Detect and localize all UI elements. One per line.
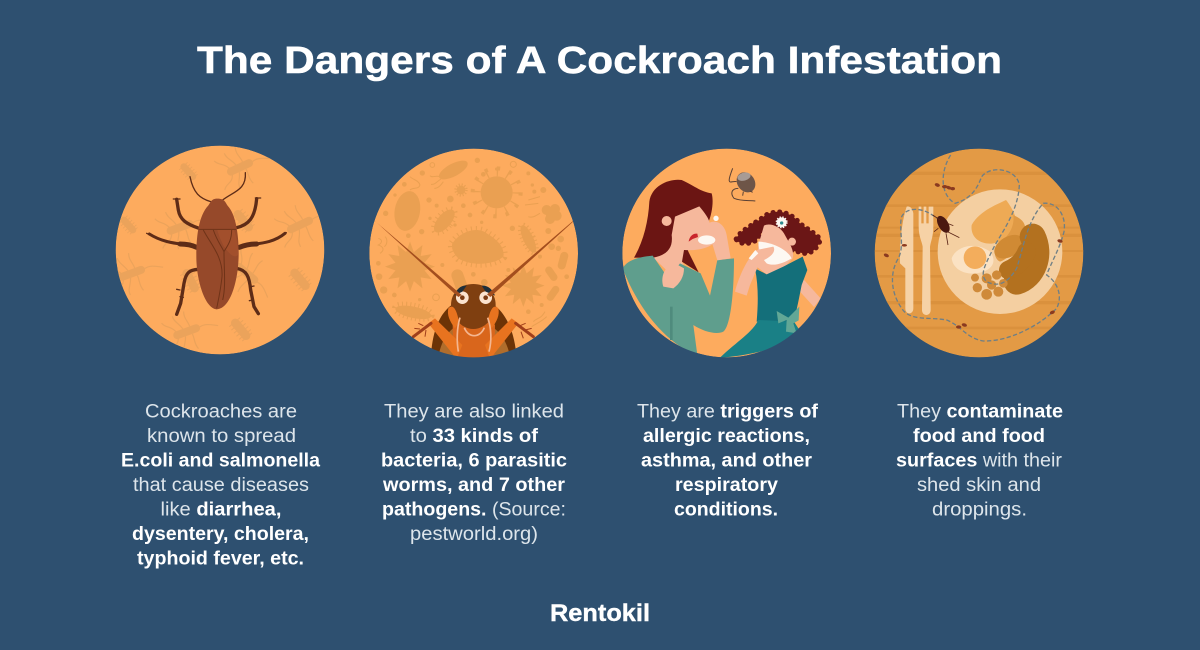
text block: column 3: respiratory bbox=[675, 475, 778, 496]
title: The Dangers of A Cockroach Infestation bbox=[197, 40, 1002, 82]
text block: column 3: conditions. bbox=[674, 500, 778, 520]
droppings bbox=[883, 183, 1063, 329]
panel: contaminated food plate illustration bbox=[874, 148, 1084, 358]
text block: column 4 bbox=[896, 402, 1063, 520]
girl bbox=[720, 212, 821, 358]
panel: sneezing woman and girl illustration bbox=[622, 149, 831, 358]
plate bbox=[938, 189, 1062, 314]
text block: column 3: allergic reactions, bbox=[643, 426, 810, 447]
text block: column 1: typhoid fever, etc. bbox=[137, 548, 304, 570]
background bacteria bbox=[116, 146, 324, 354]
knife and fork bbox=[900, 206, 933, 315]
food bbox=[952, 200, 1036, 300]
panel: bacteria and cockroach head illustration bbox=[369, 149, 578, 359]
woman bbox=[623, 180, 734, 355]
roach trail bbox=[892, 155, 1064, 341]
logo: Rentokil: Rentokil bbox=[550, 600, 650, 627]
text block: column 4: droppings. bbox=[932, 500, 1027, 520]
wood grain bbox=[874, 172, 1084, 330]
text block: column 2 bbox=[381, 402, 567, 545]
text block: column 4: food and food bbox=[913, 426, 1045, 447]
germs background bbox=[376, 157, 569, 327]
text block: column 4: They contaminate bbox=[897, 402, 1063, 422]
text block: column 3 bbox=[637, 402, 819, 520]
text block: column 1: like diarrhea, bbox=[160, 500, 282, 520]
infographic canvas bbox=[116, 45, 1084, 622]
cockroach bbox=[147, 173, 286, 314]
text block: column 1: dysentery, cholera, bbox=[132, 524, 309, 545]
text block: column 2: to 33 kinds of bbox=[410, 426, 539, 447]
text block: column 2: pathogens. (Source: bbox=[382, 500, 566, 520]
text block: column 4: shed skin and bbox=[917, 475, 1041, 496]
cockroach head bbox=[374, 220, 574, 359]
text block: column 4: surfaces with their bbox=[896, 450, 1063, 472]
text block: column 1: known to spread bbox=[147, 426, 296, 447]
text block: column 2: bacteria, 6 parasitic bbox=[381, 450, 567, 472]
cockroach flying bbox=[729, 168, 759, 201]
text block: column 1: Cockroaches are bbox=[145, 402, 297, 422]
text block: column 3: They are triggers of bbox=[637, 402, 819, 422]
text block: column 2: pestworld.org) bbox=[410, 524, 538, 545]
text block: column 1: that cause diseases bbox=[133, 475, 309, 496]
text block: column 1 bbox=[121, 402, 320, 570]
text block: column 1: E.coli and salmonella bbox=[121, 450, 320, 472]
text block: column 3: asthma, and other bbox=[641, 450, 813, 472]
text block: column 2: They are also linked bbox=[384, 402, 564, 422]
text block: column 2: worms, and 7 other bbox=[382, 475, 566, 496]
cockroach bbox=[933, 214, 959, 245]
panel: cockroach illustration bbox=[116, 146, 324, 354]
